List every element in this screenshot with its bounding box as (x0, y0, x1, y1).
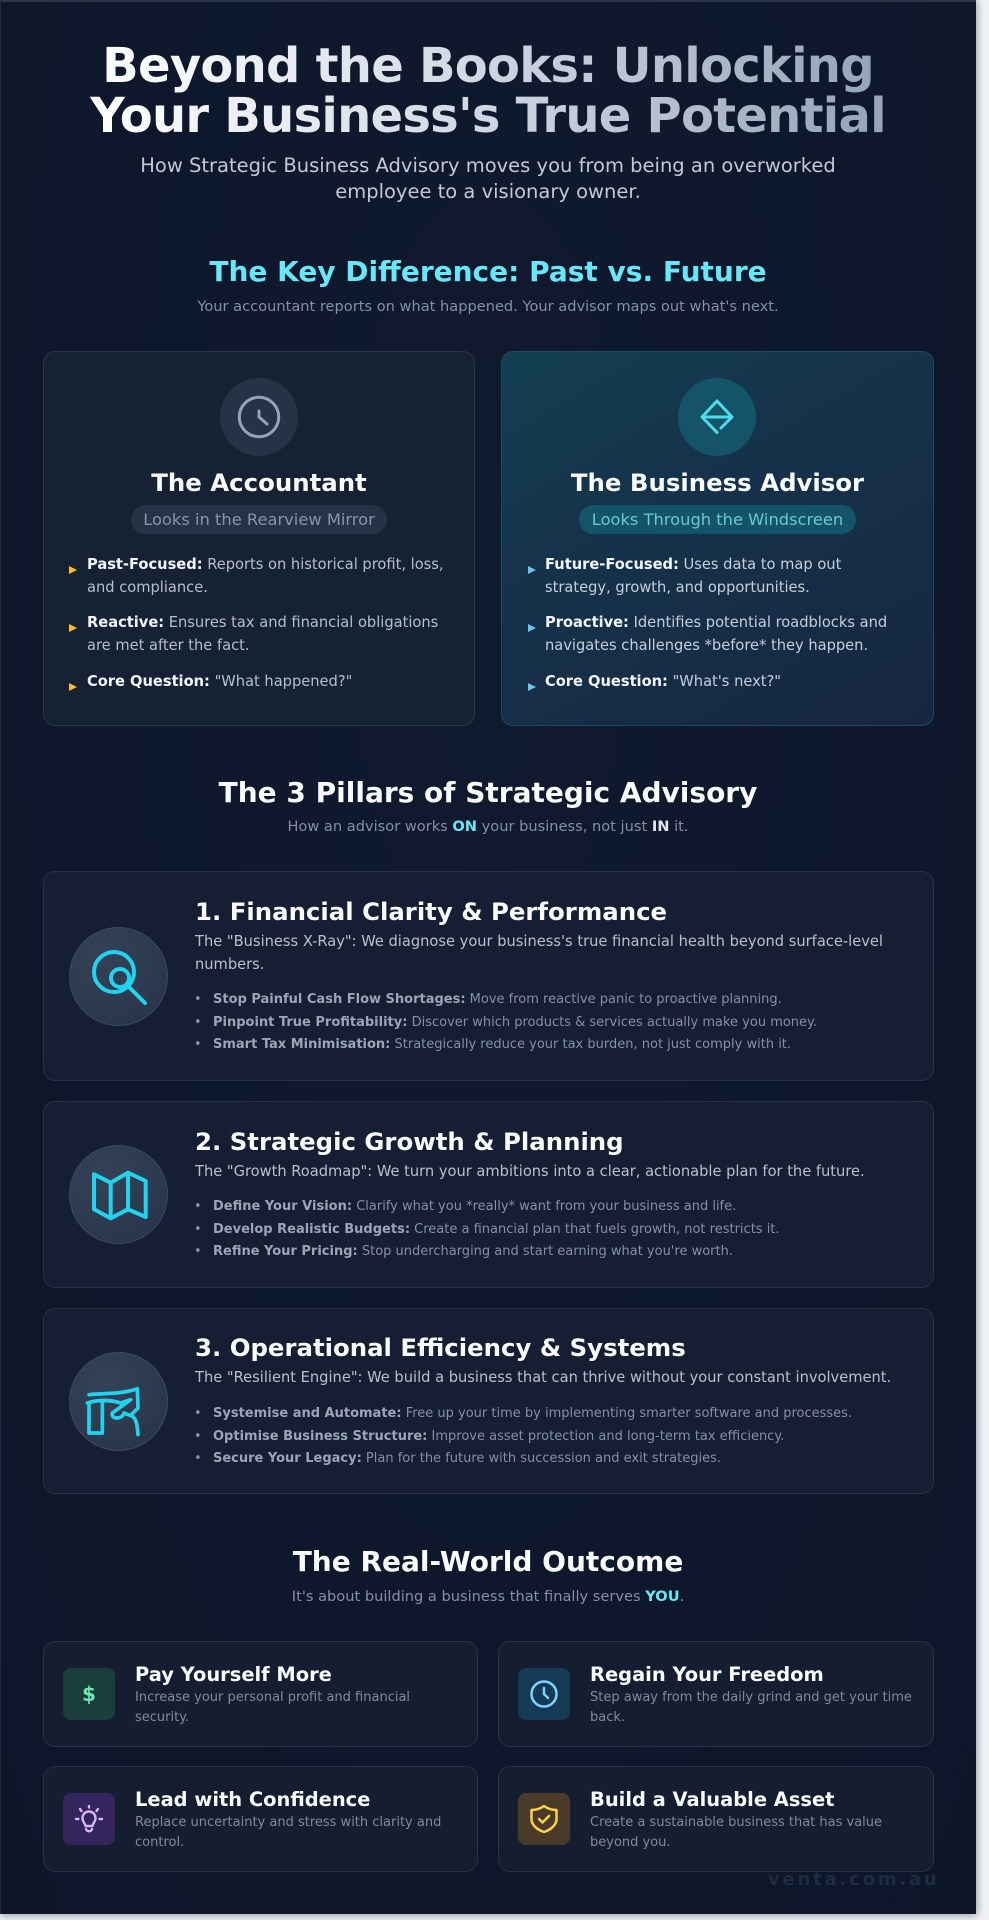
list item: proactive (545, 614, 887, 654)
list: pillar 3 bullets: Optimise Business Structure: Improve asset protection and long-term tax efficiency. (213, 1429, 784, 1444)
icon: dollar (63, 1668, 115, 1720)
panel: build a valuable asset (498, 1766, 934, 1872)
list: pillar 3 bullets: • (194, 1451, 202, 1466)
text: Replace uncertainty and stress with clarity and (135, 1815, 441, 1830)
heading: key difference: The Key Difference: Past vs. Future (209, 255, 767, 288)
list: pillar 3 bullets: • (194, 1406, 202, 1421)
list: pillar 2 bullets: Develop Realistic Budgets: Create a financial plan that fuels growth, not restricts it. (213, 1222, 780, 1237)
list item: proactive: Proactive: Identifies potential roadblocks and (545, 614, 887, 631)
text: pillar 1 description (194, 933, 883, 973)
panel: pillar 2 (43, 1101, 934, 1288)
panel: lead with confidence (43, 1766, 478, 1872)
list item: past-focused: and compliance. (87, 579, 208, 596)
panel: pay yourself more (43, 1641, 478, 1747)
subtitle (140, 154, 836, 203)
list item: reactive: Reactive: Ensures tax and financial obligations (87, 614, 438, 631)
heading: pillar 1: 1. Financial Clarity & Performance (195, 897, 667, 926)
bullet arrow (528, 683, 536, 691)
panel: the business advisor (501, 351, 934, 726)
list: pillar 3 bullets (194, 1406, 852, 1466)
icon: engine scribble (69, 1352, 168, 1451)
text: outcome subheading: It's about building a business that finally serves YOU. (292, 1588, 684, 1605)
text: control. (135, 1834, 184, 1850)
text: pillar 1 description: The "Business X-Ray": We diagnose your business's true financial health beyond surface-level (195, 933, 883, 950)
list: pillar 2 bullets: • (194, 1244, 202, 1259)
title: Beyond the Books: Unlocking (102, 38, 874, 94)
icon: shield (518, 1793, 570, 1845)
bullet arrow (69, 683, 77, 691)
panel: regain your freedom (498, 1641, 934, 1747)
heading: real-world outcome: The Real-World Outcome (293, 1545, 683, 1578)
heading: the business advisor: The Business Advisor (571, 468, 864, 497)
icon: map (69, 1145, 168, 1244)
heading: 3 pillars: The 3 Pillars of Strategic Advisory (219, 776, 757, 809)
icon: clock (220, 378, 298, 456)
list: pillar 2 bullets: Define Your Vision: Clarify what you *really* want from your business and life. (213, 1199, 736, 1214)
heading: pillar 3: 3. Operational Efficiency & Systems (195, 1333, 686, 1362)
text: security. (135, 1710, 189, 1724)
list: pillar 1 bullets: • (194, 1015, 202, 1030)
title: Your Business's True Potential (90, 88, 886, 144)
list item: proactive: navigates challenges *before* they happen. (545, 637, 868, 654)
panel: pillar 1 (43, 871, 934, 1081)
text: pillar 3 description: The "Resilient Engine": We build a business that can thrive without your constant involvement. (195, 1369, 891, 1386)
watermark: venta.com.au (768, 1869, 940, 1890)
text: beyond you. (590, 1834, 671, 1850)
panel: pillar 3 (43, 1308, 934, 1494)
list: pillar 1 bullets: • (194, 1037, 202, 1052)
bullet arrow (69, 624, 77, 632)
heading: Lead with Confidence (135, 1788, 370, 1811)
list: pillar 2 bullets: • (194, 1199, 202, 1214)
heading: pillar 2: 2. Strategic Growth & Planning (195, 1127, 624, 1156)
list: pillar 1 bullets: Smart Tax Minimisation: Strategically reduce your tax burden, not just comply with it. (213, 1037, 791, 1052)
list item: core question: Core Question: "What's next?" (545, 673, 781, 690)
tagline pill: Looks in the Rearview Mirror (143, 510, 375, 529)
list: pillar 2 bullets (194, 1199, 780, 1259)
text: pillars subheading: How an advisor works ON your business, not just IN it. (287, 818, 689, 835)
list: pillar 2 bullets: • (194, 1222, 202, 1237)
list: pillar 2 bullets: Refine Your Pricing: Stop undercharging and start earning what you're worth. (213, 1244, 733, 1259)
heading: Pay Yourself More (135, 1663, 332, 1686)
text (135, 1815, 441, 1850)
panel: the accountant (43, 351, 475, 726)
text (590, 1690, 912, 1724)
list item: future-focused (545, 556, 841, 596)
tagline pill (579, 505, 856, 534)
list item: future-focused: strategy, growth, and opportunities. (545, 579, 810, 596)
title (90, 38, 886, 144)
tagline pill: Looks Through the Windscreen (592, 510, 843, 529)
tagline pill (131, 505, 387, 534)
list: pillar 1 bullets: • (194, 992, 202, 1007)
list: pillar 3 bullets: Systemise and Automate: Free up your time by implementing smarter software and processes. (213, 1406, 852, 1421)
bullet arrow (528, 624, 536, 632)
icon: compass diamond (678, 378, 756, 456)
list item: past-focused: Past-Focused: Reports on historical profit, loss, (87, 556, 444, 573)
text: Create a sustainable business that has value (590, 1815, 882, 1830)
list item: core question: Core Question: "What happened?" (87, 673, 352, 690)
text: back. (590, 1710, 625, 1724)
icon: lightbulb (63, 1793, 115, 1845)
text (135, 1690, 410, 1724)
list item: past-focused (87, 556, 444, 596)
subtitle: employee to a visionary owner. (335, 180, 641, 203)
list item: future-focused: Future-Focused: Uses data to map out (545, 556, 841, 573)
text: Step away from the daily grind and get your time (590, 1690, 912, 1705)
list: pillar 3 bullets: Secure Your Legacy: Plan for the future with succession and exit strategies. (213, 1451, 721, 1466)
list: pillar 1 bullets: Stop Painful Cash Flow Shortages: Move from reactive panic to proactive planning. (213, 992, 782, 1007)
bullet arrow (69, 566, 77, 574)
icon: clock (518, 1668, 570, 1720)
heading: the accountant: The Accountant (151, 468, 367, 497)
list: pillar 1 bullets (194, 992, 817, 1052)
heading: Regain Your Freedom (590, 1663, 824, 1686)
list item: reactive: are met after the fact. (87, 637, 250, 654)
list: pillar 3 bullets: • (194, 1429, 202, 1444)
text: key difference subheading: Your accountant reports on what happened. Your advisor maps out what's next. (197, 298, 779, 315)
heading: Build a Valuable Asset (590, 1788, 834, 1811)
subtitle: How Strategic Business Advisory moves you from being an overworked (140, 154, 836, 177)
text: pillar 1 description: numbers. (195, 956, 264, 973)
icon: magnifying glass (69, 927, 168, 1026)
text (590, 1815, 882, 1850)
list: pillar 1 bullets: Pinpoint True Profitability: Discover which products & services actually make you money. (213, 1015, 817, 1030)
text: pillar 2 description: The "Growth Roadmap": We turn your ambitions into a clear, actionable plan for the future. (195, 1162, 865, 1180)
bullet arrow (528, 566, 536, 574)
icon: dollar: $ (82, 1682, 96, 1706)
text: Increase your personal profit and financial (135, 1690, 410, 1705)
list item: reactive (87, 614, 438, 654)
